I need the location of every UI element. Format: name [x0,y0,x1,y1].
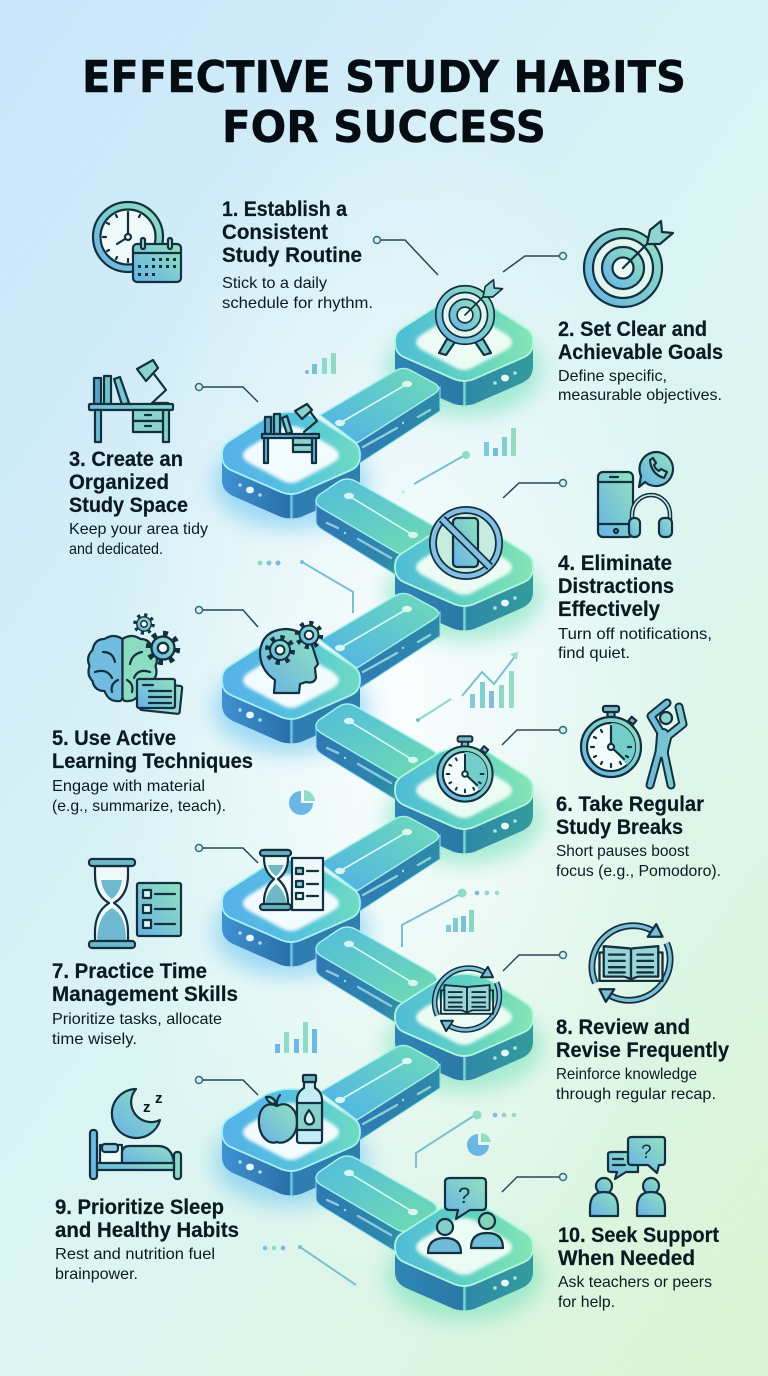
title: EFFECTIVE STUDY HABITS [82,52,686,103]
heading 8: review [556,1016,729,1103]
icon: moon and bed: z [143,1099,150,1116]
heading 3: study space: Keep your area tidy [69,521,208,538]
icon: apple and bottle on platform [259,1075,322,1143]
heading 3: study space: Study Space [69,494,188,517]
heading 2: goals: Define specific, [558,368,667,385]
icon: desk on platform [262,404,319,463]
heading 5: active learning: Engage with material [52,778,205,795]
heading 9: sleep: 9. Prioritize Sleep [55,1196,224,1219]
heading 2: goals [558,318,723,404]
heading 7: time management: time wisely. [52,1031,137,1048]
connector 8 to 9 [320,1046,440,1142]
icon: brain and gears [88,615,182,714]
platform 3 [213,412,369,529]
background mini charts and accents [258,353,518,1285]
icon: moon and bed [90,1089,181,1179]
heading 1: establish routine: Stick to a daily [222,275,327,292]
heading 9: sleep: Rest and nutrition fuel [55,1246,215,1263]
icon: head with gears on platform [260,623,321,693]
platform 5 [213,637,369,754]
heading 6: breaks [556,793,721,880]
heading 10: support: for help. [558,1294,615,1311]
heading 2: goals: Achievable Goals [558,341,723,364]
heading 1: establish routine: 1. Establish a [222,198,347,221]
heading 1: establish routine: Consistent [222,221,328,244]
heading 4: distractions: Turn off notifications, [558,626,712,643]
icon: stopwatch and stretching figure [581,703,683,785]
connector 4 to 5 [320,594,440,690]
heading 6: breaks: Study Breaks [556,816,683,839]
heading 4: distractions: Effectively [558,598,660,621]
heading 6: breaks: Short pauses boost [556,843,690,860]
connector 9 to 10 [316,1156,437,1258]
platform 1 [386,299,542,416]
icon: book with arrows on platform [435,967,499,1031]
icon: no phone on platform [433,510,499,576]
connector 1 to 3 [320,368,440,465]
heading 5: active learning [52,727,253,815]
heading 5: active learning: Learning Techniques [52,750,253,773]
icon: question bubble and people on platform: ? [458,1183,470,1208]
heading 4: distractions: Distractions [558,575,674,598]
platform 9 [213,1089,369,1206]
heading 8: review: Revise Frequently [556,1039,729,1062]
leader lines [196,236,566,1192]
heading 4: distractions [558,552,712,662]
heading 9: sleep [55,1196,239,1283]
title [82,52,686,153]
connector 7 to 8 [316,927,437,1029]
heading 10: support: 10. Seek Support [558,1224,719,1247]
icon: target large [584,221,673,307]
heading 1: establish routine: Study Routine [222,244,362,267]
heading 3: study space: 3. Create an [69,448,183,471]
icon: target on platform [436,280,502,355]
icon: clock and calendar [93,202,181,282]
icon: stopwatch on platform [437,736,493,802]
heading 4: distractions: 4. Eliminate [558,552,672,575]
heading 10: support: Ask teachers or peers [558,1274,712,1291]
heading 7: time management [52,960,238,1048]
icon: moon and bed: z [155,1090,162,1107]
icon: desk large [89,360,173,442]
heading 5: active learning: (e.g., summarize, teach). [52,798,226,815]
icon: two people with chat bubbles: ? [641,1142,652,1163]
icon: book with review arrows [592,924,670,1002]
heading 6: breaks: focus (e.g., Pomodoro). [556,863,721,880]
icon: two people with chat bubbles [590,1137,665,1216]
connector 6 to 7 [320,816,440,913]
platform 7 [213,860,369,977]
heading 2: goals: measurable objectives. [558,387,722,404]
connector 5 to 6 [316,704,437,806]
platform 4 [386,524,542,641]
heading 6: breaks: 6. Take Regular [556,793,704,816]
heading 9: sleep: and Healthy Habits [55,1219,239,1242]
isometric platform path [213,299,542,1321]
heading 8: review: through regular recap. [556,1086,716,1103]
heading 2: goals: 2. Set Clear and [558,318,707,341]
icon: hourglass and checklist [89,859,181,948]
heading 3: study space: and dedicated. [69,541,163,558]
heading 10: support [558,1224,719,1311]
heading 1: establish routine: schedule for rhythm. [222,295,373,312]
title: FOR SUCCESS [222,102,546,153]
heading 8: review: 8. Review and [556,1016,690,1039]
heading 4: distractions: find quiet. [558,645,630,662]
platform 8 [386,974,542,1091]
heading 1: establish routine [222,198,373,312]
heading 9: sleep: brainpower. [55,1266,138,1283]
platform 6 [386,747,542,864]
heading 3: study space [69,448,208,558]
heading 3: study space: Organized [69,471,169,494]
platform 10 [386,1204,542,1321]
heading 10: support: When Needed [558,1247,695,1270]
icon: hourglass and checklist on platform [260,850,323,910]
heading 7: time management: Management Skills [52,983,238,1006]
heading 7: time management: 7. Practice Time [52,960,207,983]
heading 7: time management: Prioritize tasks, allocate [52,1011,222,1028]
heading 8: review: Reinforce knowledge [556,1066,697,1083]
icon: question bubble and people on platform [428,1178,503,1253]
connector 3 to 4 [316,479,437,581]
icon: phone headset chat [598,452,673,537]
heading 5: active learning: 5. Use Active [52,727,176,750]
